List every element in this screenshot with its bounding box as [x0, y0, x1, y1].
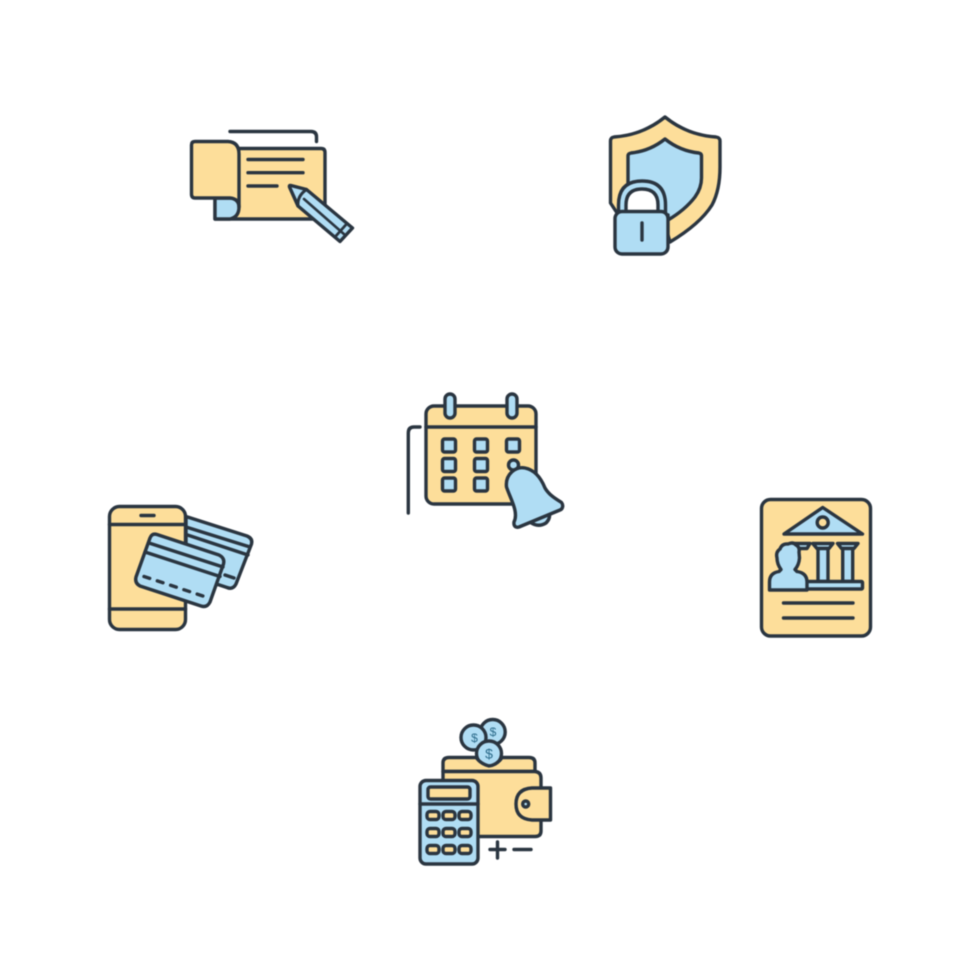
coin symbols: $	[485, 746, 493, 762]
icon: bank document	[762, 500, 870, 636]
icon: phone with payment cards	[110, 506, 252, 630]
coin symbols: $	[490, 725, 497, 739]
calculator	[420, 780, 478, 864]
plus and minus signs	[490, 842, 531, 858]
person	[770, 543, 807, 590]
padlock	[615, 181, 668, 254]
icon: shield with padlock	[610, 117, 720, 254]
icon: document with pencil	[192, 132, 352, 242]
front card	[136, 534, 224, 606]
bell	[506, 460, 563, 527]
coin symbols	[471, 725, 497, 762]
icon: wallet with coins and calculator	[420, 720, 550, 864]
coin symbols: $	[471, 731, 478, 745]
back card	[186, 516, 252, 588]
icon: calendar with bell	[408, 394, 563, 527]
